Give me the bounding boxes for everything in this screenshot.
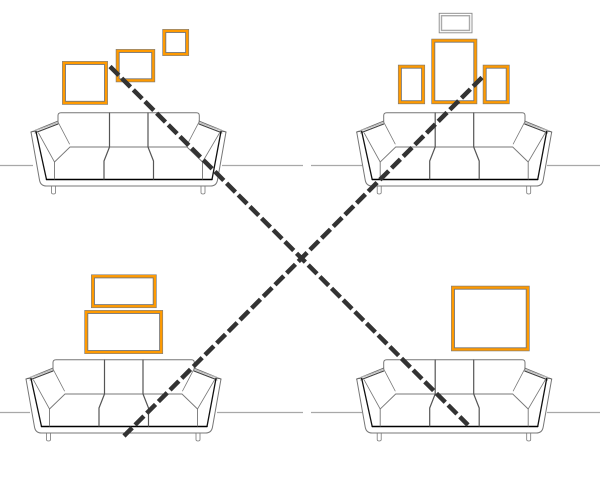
frames: top left staircase arrangement bbox=[62, 30, 189, 104]
frames: bottom left stacked arrangement bbox=[85, 275, 163, 354]
frame: large square bbox=[62, 62, 108, 104]
frame: small white top frame bbox=[439, 13, 472, 33]
frames: top right pyramid arrangement bbox=[398, 13, 509, 104]
frame: medium bbox=[116, 50, 155, 82]
floor line: top left bbox=[0, 164, 303, 166]
frame: left bbox=[398, 65, 425, 104]
cross: dashed diagonal from top left to bottom right bbox=[110, 66, 468, 425]
floor line: bottom left bbox=[0, 412, 303, 414]
floor line: bottom right bbox=[311, 412, 600, 414]
frame: small square bbox=[163, 30, 189, 56]
sofa: top left bbox=[31, 113, 226, 194]
sofa: top right bbox=[357, 113, 552, 194]
frame: right bbox=[483, 65, 509, 104]
frame: lower bbox=[85, 310, 163, 354]
frame: tall centre bbox=[432, 39, 477, 104]
frame: upper bbox=[92, 275, 156, 308]
cross: dashed diagonal from top right to bottom left bbox=[124, 78, 482, 436]
sofa: bottom right bbox=[357, 360, 552, 441]
floor line: top right bbox=[311, 164, 600, 166]
sofa: bottom left bbox=[26, 360, 221, 441]
frame: bottom right single large bbox=[452, 286, 529, 351]
